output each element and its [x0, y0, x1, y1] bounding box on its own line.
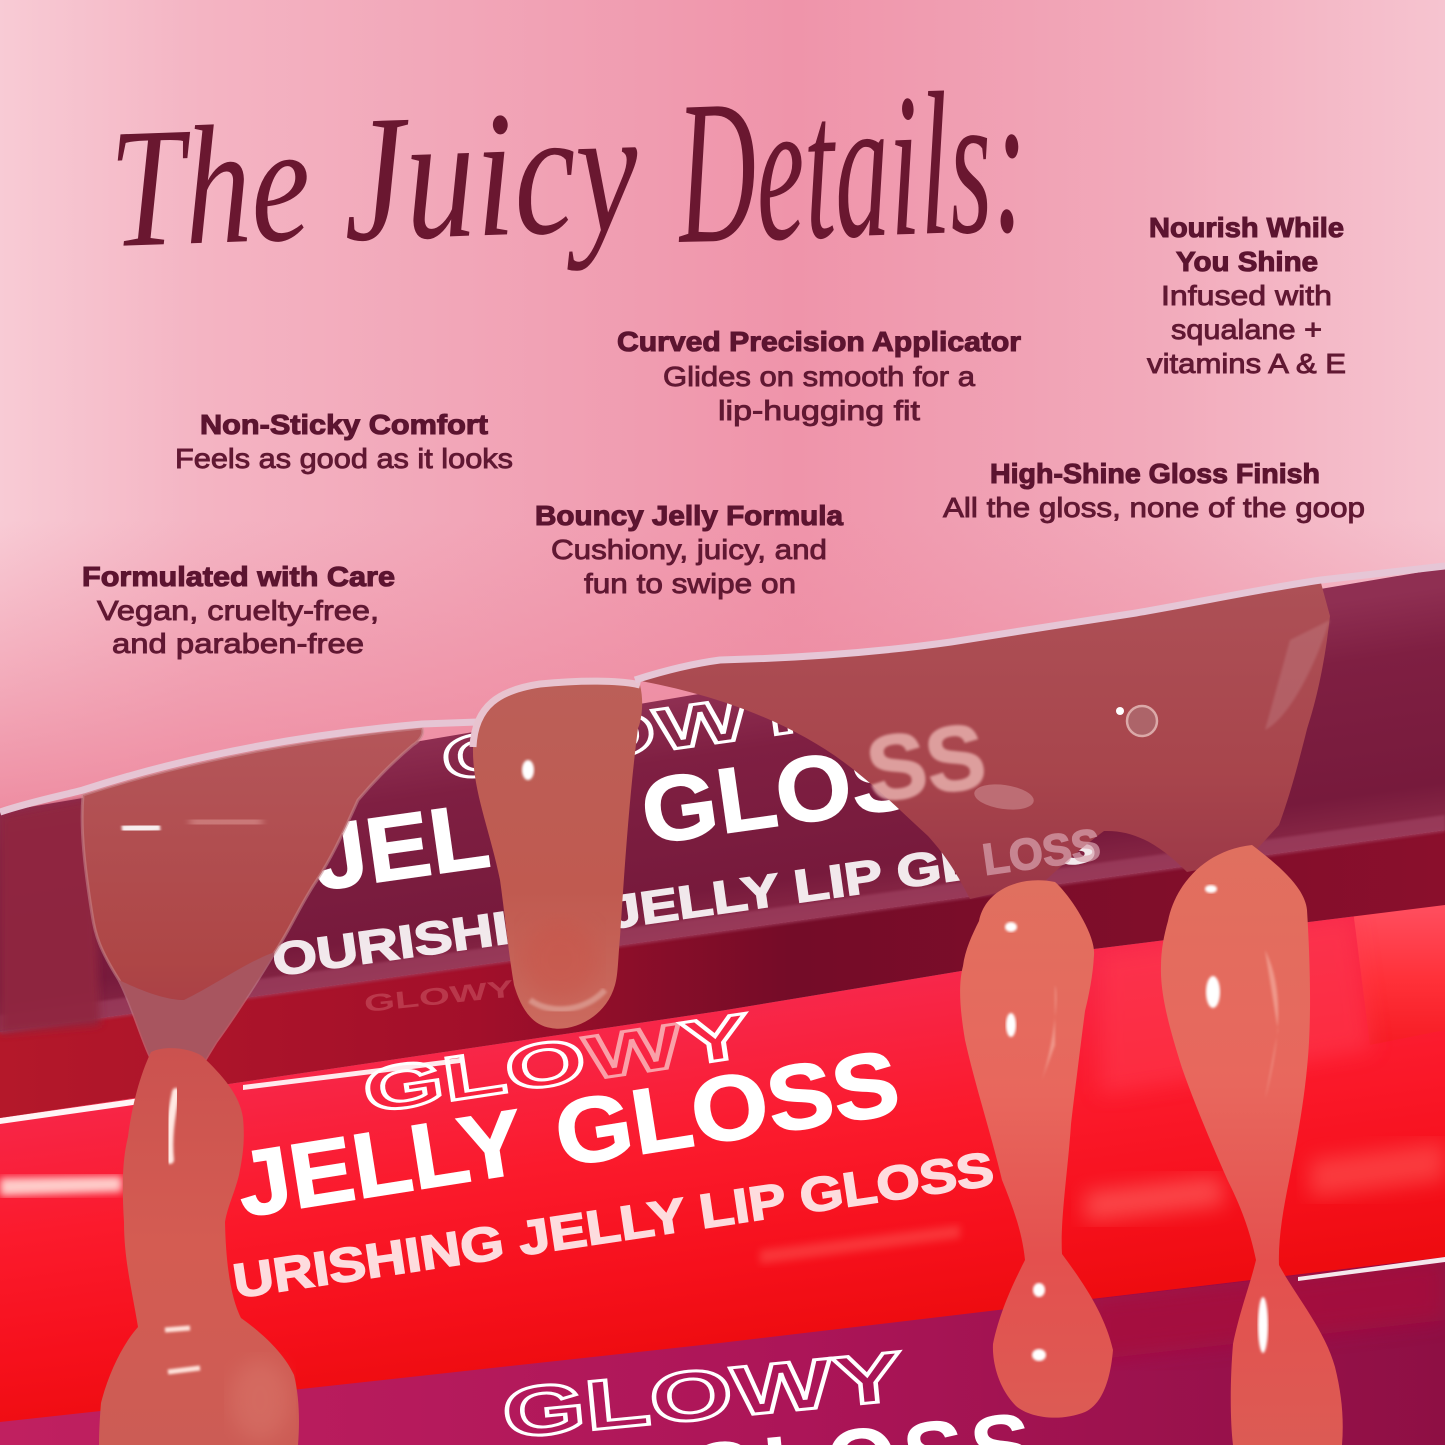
text block: bouncy jelly formula: [535, 500, 843, 599]
title: The: [107, 88, 313, 283]
text block: non-sticky comfort: [175, 409, 513, 474]
right long drip: [1161, 845, 1343, 1445]
band highlight line: [635, 566, 1445, 680]
magenta tube: [0, 1240, 1445, 1445]
text block: formulated with care: Formulated with Care: [82, 561, 395, 592]
text block: nourish while you shine: squalane +: [1171, 314, 1322, 345]
text block: nourish while you shine: Infused with: [1161, 280, 1332, 311]
text block: bouncy jelly formula: Cushiony, juicy, and: [551, 534, 827, 565]
text block: high-shine gloss finish: High-Shine Gloss Finish: [990, 458, 1320, 489]
bubble: [1127, 706, 1157, 736]
gloss: right band with two drips: [635, 566, 1445, 1445]
tube label: nourishing jelly lip gloss: URISHING JELLY LIP GLOSS: [230, 1143, 997, 1309]
text block: high-shine gloss finish: [943, 458, 1365, 523]
text block: nourish while you shine: Nourish While: [1149, 212, 1344, 243]
left long drip: [960, 880, 1113, 1418]
tube label: glowy: GLOWY: [437, 675, 818, 794]
title: Details:: [672, 48, 1031, 287]
gloss: left blob and drip: [0, 722, 478, 1445]
text block: formulated with care: and paraben-free: [112, 628, 364, 659]
drip highlights: [1006, 1013, 1016, 1037]
tube label: glowy: GLO W Y: [359, 1001, 755, 1127]
text block: curved precision applicator: [617, 326, 1021, 426]
gloss overlay text: SS: [861, 704, 992, 822]
faint reflected label: GLOWY: [363, 975, 515, 1018]
text block: nourish while you shine: vitamins A & E: [1147, 348, 1346, 379]
tube label: jelly gloss: JELLY: [230, 1091, 531, 1237]
tube label: jelly gloss: [230, 1032, 906, 1237]
gloss: right band with two drips: LOSS: [980, 820, 1103, 885]
text block: curved precision applicator: Glides on smooth for a: [663, 361, 975, 392]
red tube: [0, 904, 1445, 1422]
text block: formulated with care: Vegan, cruelty-free,: [97, 595, 379, 626]
title: [107, 48, 1031, 287]
tube label: jelly gloss: GLOSS: [548, 1032, 906, 1186]
text block: bouncy jelly formula: Bouncy Jelly Formula: [535, 500, 843, 531]
tube label: jelly gloss: GLOSS: [635, 716, 986, 864]
text block: formulated with care: [82, 561, 395, 659]
text block: non-sticky comfort: Feels as good as it looks: [175, 443, 513, 474]
tube label: jelly gloss: [307, 716, 986, 910]
gloss highlight line: [0, 722, 478, 812]
text block: nourish while you shine: [1147, 212, 1346, 379]
text block: curved precision applicator: lip-hugging fit: [718, 395, 920, 426]
text block: non-sticky comfort: Non-Sticky Comfort: [200, 409, 488, 440]
title: Juicy: [339, 70, 641, 279]
tube label: jelly gloss: JELLY: [307, 769, 608, 910]
text block: bouncy jelly formula: fun to swipe on: [584, 568, 796, 599]
text block: high-shine gloss finish: All the gloss, none of the goop: [943, 492, 1365, 523]
maroon tube: [0, 568, 1445, 1118]
text block: nourish while you shine: You Shine: [1176, 246, 1318, 277]
tube label: nourishing jelly lip gloss: OURISHING JELLY LIP GLOSS: [269, 819, 1098, 986]
gloss: centre drip: [473, 681, 642, 1029]
text block: curved precision applicator: Curved Precision Applicator: [617, 326, 1021, 357]
tube side reflections: [1265, 620, 1330, 730]
